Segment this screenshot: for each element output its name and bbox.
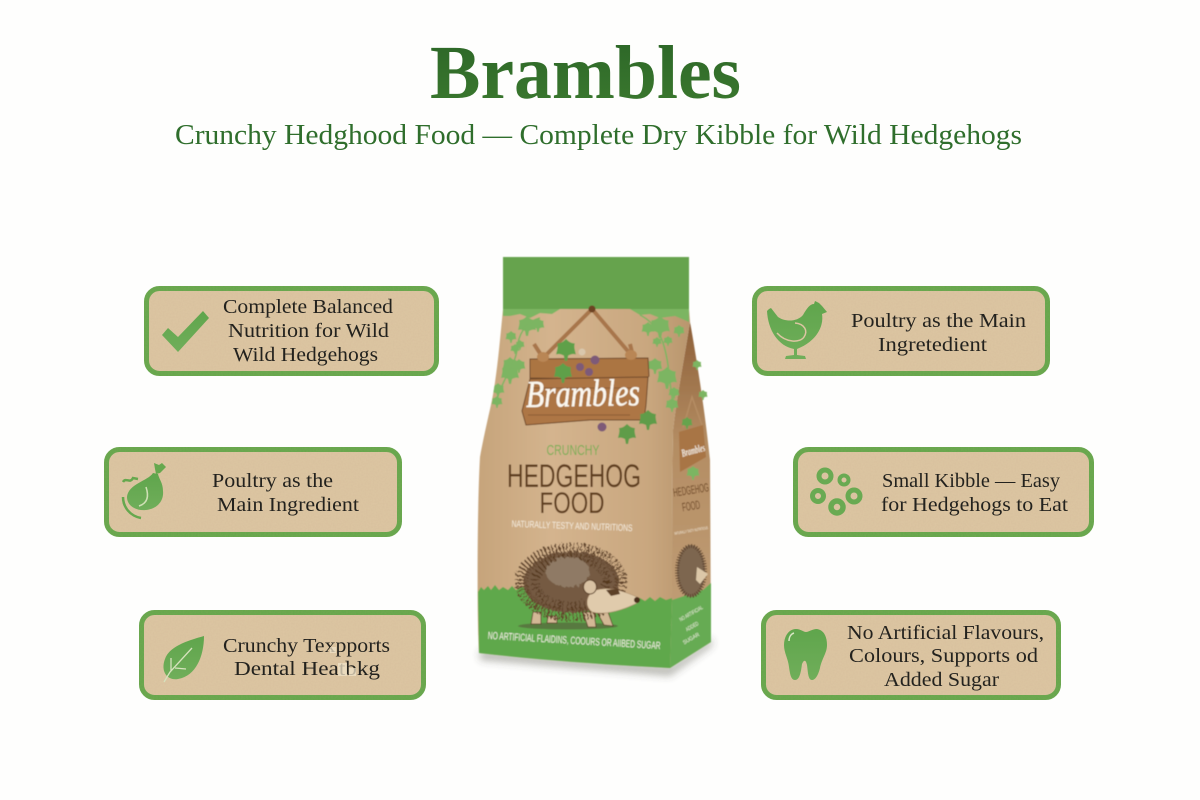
icon: check mark (162, 311, 209, 352)
hedgehog nose (634, 597, 640, 603)
bag side hedgehog (677, 545, 708, 597)
card text: Small Kibble — Easy (882, 470, 1061, 492)
card text (223, 296, 393, 366)
sign leaves and berries (554, 339, 657, 444)
icon: kibble rings (812, 470, 860, 513)
hedgehog head (587, 589, 639, 613)
hedgehog ear (584, 580, 596, 594)
bag side claim (679, 605, 704, 646)
bag side label: FOOD (681, 498, 701, 514)
icon: hen (767, 301, 827, 359)
product bag (478, 257, 712, 676)
card text: Ingretedient (878, 334, 987, 356)
card background (754, 288, 1048, 374)
panel: poultry left (106, 450, 400, 534)
panel: no artificial (764, 612, 1058, 698)
bag label: food: FOOD (540, 487, 604, 520)
bag side sign (679, 397, 706, 480)
card background (106, 450, 400, 534)
card text: Poultry as the (212, 470, 333, 492)
subtitle: Crunchy Hedghood Food — Complete Dry Kibble for Wild Hedgehogs (175, 120, 1022, 151)
bag side claim: NO ARTIFICIAL (679, 605, 704, 623)
card text: No Artificial Flavours, (847, 622, 1044, 644)
bag side label (672, 480, 710, 536)
card text: for Hedgehogs to Eat (881, 494, 1068, 516)
hedgehog eye patch (606, 589, 620, 596)
bag side panel (670, 322, 711, 668)
bag label: hedgehog: HEDGEHOG (507, 458, 641, 494)
card text: Wild Hedgehogs (233, 344, 378, 366)
card text: Dental Heatbkg (234, 658, 380, 680)
bag bottom claim: NO ARTIFICIAL FLAIDINS, COOURS OR AIIBED SUGAR (487, 630, 661, 652)
card background (764, 612, 1058, 698)
card text: Complete Balanced (223, 296, 393, 318)
icon: leaf (163, 636, 204, 682)
card text: Crunchy Texpports (223, 635, 390, 657)
bag side label: NATURALLY TASTY NUTRITIOUS (674, 525, 708, 536)
hedgehog illustration (518, 549, 640, 630)
bag front panel (478, 257, 690, 668)
card text: Added Sugar (884, 669, 999, 691)
card text (212, 470, 359, 516)
hedgehog legs (531, 612, 613, 627)
card background (142, 612, 424, 698)
bag label: crunchy: CRUNCHY (546, 442, 600, 459)
bag side claim: ADDED (685, 621, 700, 633)
bag grass side (670, 583, 711, 668)
panel: complete nutrition (146, 288, 436, 374)
title: Brambles (430, 31, 741, 115)
hedgehog shadow (518, 622, 618, 630)
bag tagline: NATURALLY TESTY AND NUTRITIONS (511, 519, 633, 534)
ivy left (492, 309, 560, 408)
bag shadow (480, 638, 712, 676)
text artifact patches (330, 647, 356, 676)
bag brand name: Brambles (526, 372, 640, 416)
panel: dental health (142, 612, 424, 698)
ivy right (630, 309, 708, 412)
card text (851, 310, 1026, 356)
card background (146, 288, 436, 374)
panel: poultry right (754, 288, 1048, 374)
card text (223, 635, 390, 680)
bag side sign: Brambles (680, 442, 706, 460)
card text: Poultry as the Main (851, 310, 1026, 332)
hanging sign (522, 306, 649, 425)
bag side claim: SUGAR (682, 632, 701, 646)
card text (847, 622, 1044, 691)
hedgehog spines (521, 549, 621, 615)
bag side label: HEDGEHOG (672, 480, 710, 500)
bag top band (503, 257, 689, 309)
bag grass front (478, 585, 672, 668)
card text: Nutrition for Wild (228, 320, 389, 342)
card text (881, 470, 1068, 516)
card background (796, 450, 1092, 534)
panel: small kibble (796, 450, 1092, 534)
icon: tooth (784, 629, 827, 680)
icon: poultry leg (123, 463, 166, 518)
card text: Main Ingredient (217, 494, 359, 516)
card text: Colours, Supports od (849, 645, 1038, 667)
